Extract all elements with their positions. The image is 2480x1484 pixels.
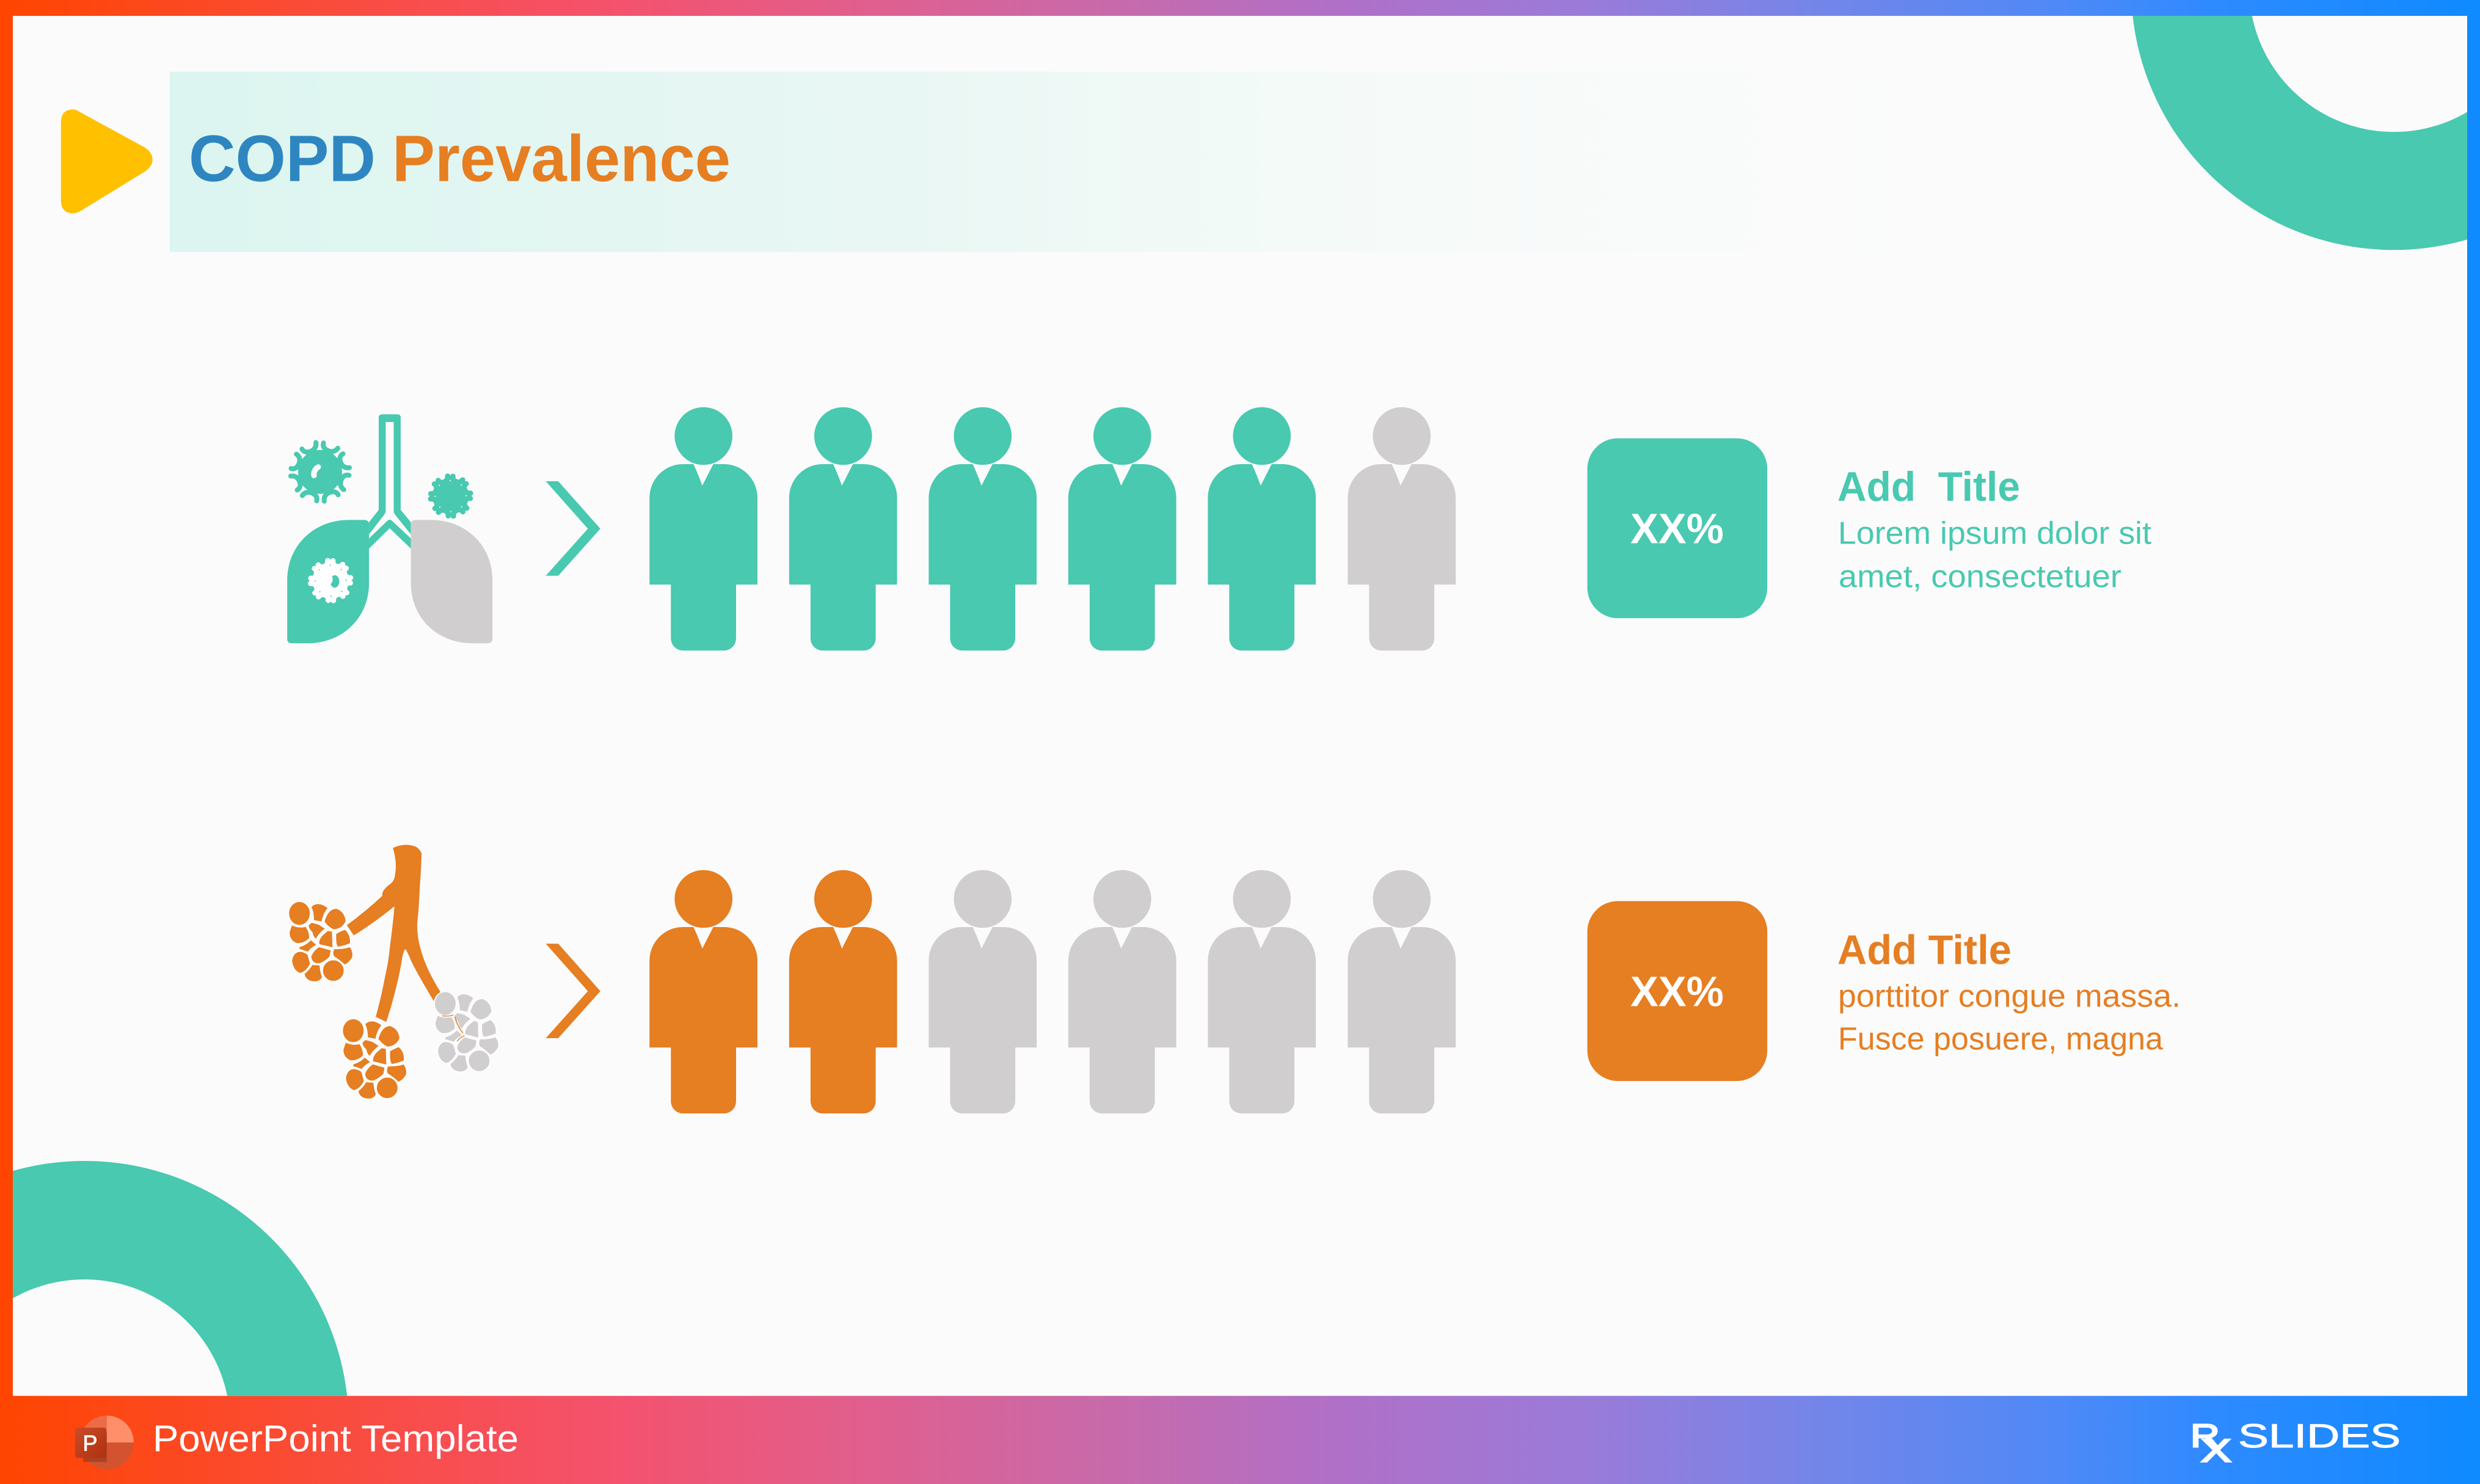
person 4: [1068, 407, 1176, 650]
text block: [1837, 926, 2181, 1057]
description line 2: Fusce posuere, magna: [1838, 1022, 2163, 1057]
text block: [1837, 464, 2152, 595]
percent value: XX%: [1630, 967, 1724, 1015]
logo: Rx Slides: [2190, 1417, 2401, 1469]
icon: PowerPoint logo: [75, 1416, 134, 1469]
person 1: [649, 870, 757, 1113]
trachea and bronchi: [287, 414, 492, 643]
alveoli cluster: right grey: [434, 992, 499, 1072]
percent value: XX%: [1630, 504, 1724, 552]
icon: white virus inside lung: [310, 561, 351, 601]
person 5: [1208, 870, 1316, 1113]
person 4: [1068, 870, 1176, 1113]
icon: lungs with viruses: [287, 414, 492, 643]
title: COPD: [189, 122, 376, 195]
PowerPoint logo letter: P: [83, 1431, 98, 1456]
person 3: [928, 407, 1037, 650]
person 1: [649, 407, 757, 650]
person 2: [789, 870, 897, 1113]
row 2: orange: [288, 845, 2181, 1113]
arrow: chevron: [546, 481, 600, 576]
title: second word: Prevalence: [392, 122, 731, 195]
description line 1: porttitor congue massa.: [1838, 979, 2181, 1014]
icon: small virus: [431, 476, 471, 516]
person 3: [928, 870, 1037, 1113]
right lung: [411, 520, 492, 643]
icon: yellow play arrow: [61, 109, 153, 213]
icon: bronchi with alveoli: [288, 845, 499, 1099]
decorative ring: bottom left: [13, 1161, 347, 1396]
percent badge: [1588, 438, 1767, 618]
person 6: [1348, 870, 1456, 1113]
people row: 2 of 6: [649, 870, 1456, 1113]
footer label: PowerPoint Template: [153, 1418, 519, 1460]
description line 2: amet, consectetuer: [1839, 559, 2121, 595]
description line 1: Lorem ipsum dolor sit: [1838, 516, 2152, 551]
people row: 5 of 6: [649, 407, 1456, 650]
percent badge: [1588, 901, 1767, 1081]
person 5: [1208, 407, 1316, 650]
left lung: [287, 520, 369, 643]
icon: large virus: [291, 442, 349, 501]
logo: Rx Slides: X: [2201, 1433, 2231, 1469]
person 2: [789, 407, 897, 650]
arrow: chevron: [546, 944, 600, 1038]
person 6: [1348, 407, 1456, 650]
bronchial tree: [347, 845, 440, 1022]
logo: Rx Slides: SLIDES: [2238, 1417, 2401, 1455]
title banner: [170, 71, 1936, 252]
heading: Add Title: [1837, 926, 2011, 973]
row 1: teal: [287, 407, 2152, 650]
decorative ring: top right: [2132, 16, 2467, 250]
alveoli cluster: left: [288, 901, 353, 982]
logo: Rx Slides: R: [2190, 1418, 2220, 1454]
heading: Add Title: [1837, 464, 2020, 510]
alveoli cluster: bottom: [342, 1019, 407, 1099]
